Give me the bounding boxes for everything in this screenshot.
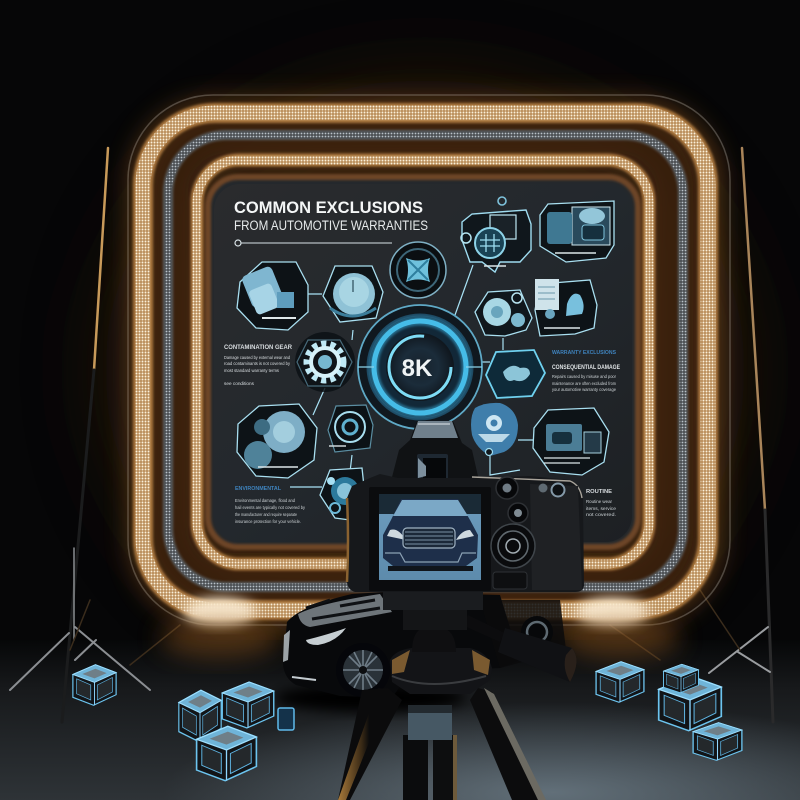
text block: right lower: ROUTINE bbox=[586, 489, 612, 495]
icon: lower gear bbox=[320, 468, 366, 520]
text block: left lower: the manufacturer and require separate bbox=[235, 512, 297, 518]
icon: round seal bbox=[390, 242, 446, 298]
text block: right upper bbox=[552, 350, 620, 392]
floor bbox=[0, 640, 800, 800]
text block: left upper: CONTAMINATION GEAR bbox=[224, 345, 293, 351]
backdrop glow bbox=[105, 80, 745, 660]
box bbox=[693, 723, 742, 760]
icon: small lens bbox=[328, 405, 373, 452]
chart: central 8K dial: 8K bbox=[402, 355, 433, 382]
inner led ring bbox=[197, 160, 649, 564]
text block: right upper: WARRANTY EXCLUSIONS bbox=[552, 350, 616, 356]
text block: left lower: hail events are typically not covered by bbox=[235, 505, 306, 511]
panel: infographic board bbox=[207, 176, 639, 548]
icon: gear bbox=[295, 332, 355, 392]
text block: left lower bbox=[235, 486, 306, 525]
text block: left lower: Environmental damage, flood and bbox=[235, 498, 295, 504]
camera screen bbox=[369, 487, 491, 591]
title bbox=[234, 199, 428, 246]
box bbox=[664, 664, 698, 693]
text block: left upper: road contaminants is not covered by bbox=[224, 361, 291, 366]
text block: left lower: ENVIRONMENTAL bbox=[235, 486, 282, 492]
box bbox=[596, 662, 644, 702]
box bbox=[179, 690, 221, 742]
camera dials bbox=[491, 477, 564, 589]
car bbox=[275, 592, 566, 712]
light frame bbox=[128, 95, 730, 625]
icon: gear small bbox=[475, 290, 532, 336]
boxes: left group bbox=[73, 665, 294, 781]
icon: camera panel bbox=[540, 201, 614, 262]
text block: left lower: insurance protection for your vehicle. bbox=[235, 519, 301, 525]
corner highlights bbox=[160, 598, 680, 658]
viewfinder bbox=[417, 454, 448, 482]
tripod left leg bbox=[338, 688, 402, 800]
car wheel bbox=[336, 643, 390, 697]
text block: right upper: maintenance are often excluded from bbox=[552, 381, 616, 386]
icon: blue badge bbox=[471, 403, 518, 456]
box bbox=[197, 726, 256, 781]
text block: right lower: Routine wear bbox=[586, 499, 612, 505]
car on screen bbox=[383, 499, 478, 571]
camera bbox=[347, 421, 584, 592]
light stands bbox=[10, 148, 773, 722]
text block: right lower: not covered. bbox=[586, 512, 616, 518]
outer led ring bbox=[143, 113, 708, 610]
connector lines bbox=[290, 265, 540, 487]
text block: right lower bbox=[586, 489, 616, 518]
text block: left upper: see conditions bbox=[224, 381, 255, 386]
text block: right lower: items, service bbox=[586, 506, 616, 512]
title: COMMON EXCLUSIONS bbox=[234, 199, 423, 217]
tripod center column bbox=[403, 735, 428, 800]
tripod handle bbox=[462, 615, 505, 642]
outer thin frame bbox=[128, 95, 730, 625]
text block: right upper: Repairs caused by misuse and poor bbox=[552, 374, 616, 379]
icon: gauge bbox=[323, 266, 383, 322]
camera body bbox=[347, 474, 584, 592]
tripod bbox=[338, 592, 577, 800]
text block: left upper: most standard warranty terms bbox=[224, 368, 280, 373]
icon: machine panel bbox=[533, 408, 609, 475]
small box bbox=[278, 708, 294, 730]
icon: engine octagon bbox=[237, 404, 317, 478]
fill between rings bbox=[170, 135, 675, 585]
text block: left upper bbox=[224, 345, 293, 386]
text block: left upper: Damage caused by external wear and bbox=[224, 355, 290, 360]
box bbox=[222, 682, 274, 728]
chart: central 8K dial bbox=[358, 305, 482, 429]
middle silver ring bbox=[168, 135, 683, 587]
tripod head bbox=[390, 648, 492, 694]
icon: engine part bbox=[461, 197, 531, 272]
box bbox=[659, 676, 721, 731]
tripod right leg bbox=[470, 688, 544, 800]
camera prism bbox=[390, 421, 480, 485]
icon: hex part bbox=[486, 350, 545, 398]
box bbox=[73, 665, 116, 705]
text block: right upper: CONSEQUENTIAL DAMAGE bbox=[552, 365, 620, 371]
frame glow bbox=[143, 113, 708, 610]
boxes: right group bbox=[596, 662, 742, 760]
camera mount bbox=[403, 606, 467, 630]
icon: document panel bbox=[535, 279, 597, 336]
icon: parts octagon bbox=[237, 262, 308, 330]
title: FROM AUTOMOTIVE WARRANTIES bbox=[234, 218, 428, 233]
text block: right upper: your automotive warranty coverage bbox=[552, 387, 616, 392]
